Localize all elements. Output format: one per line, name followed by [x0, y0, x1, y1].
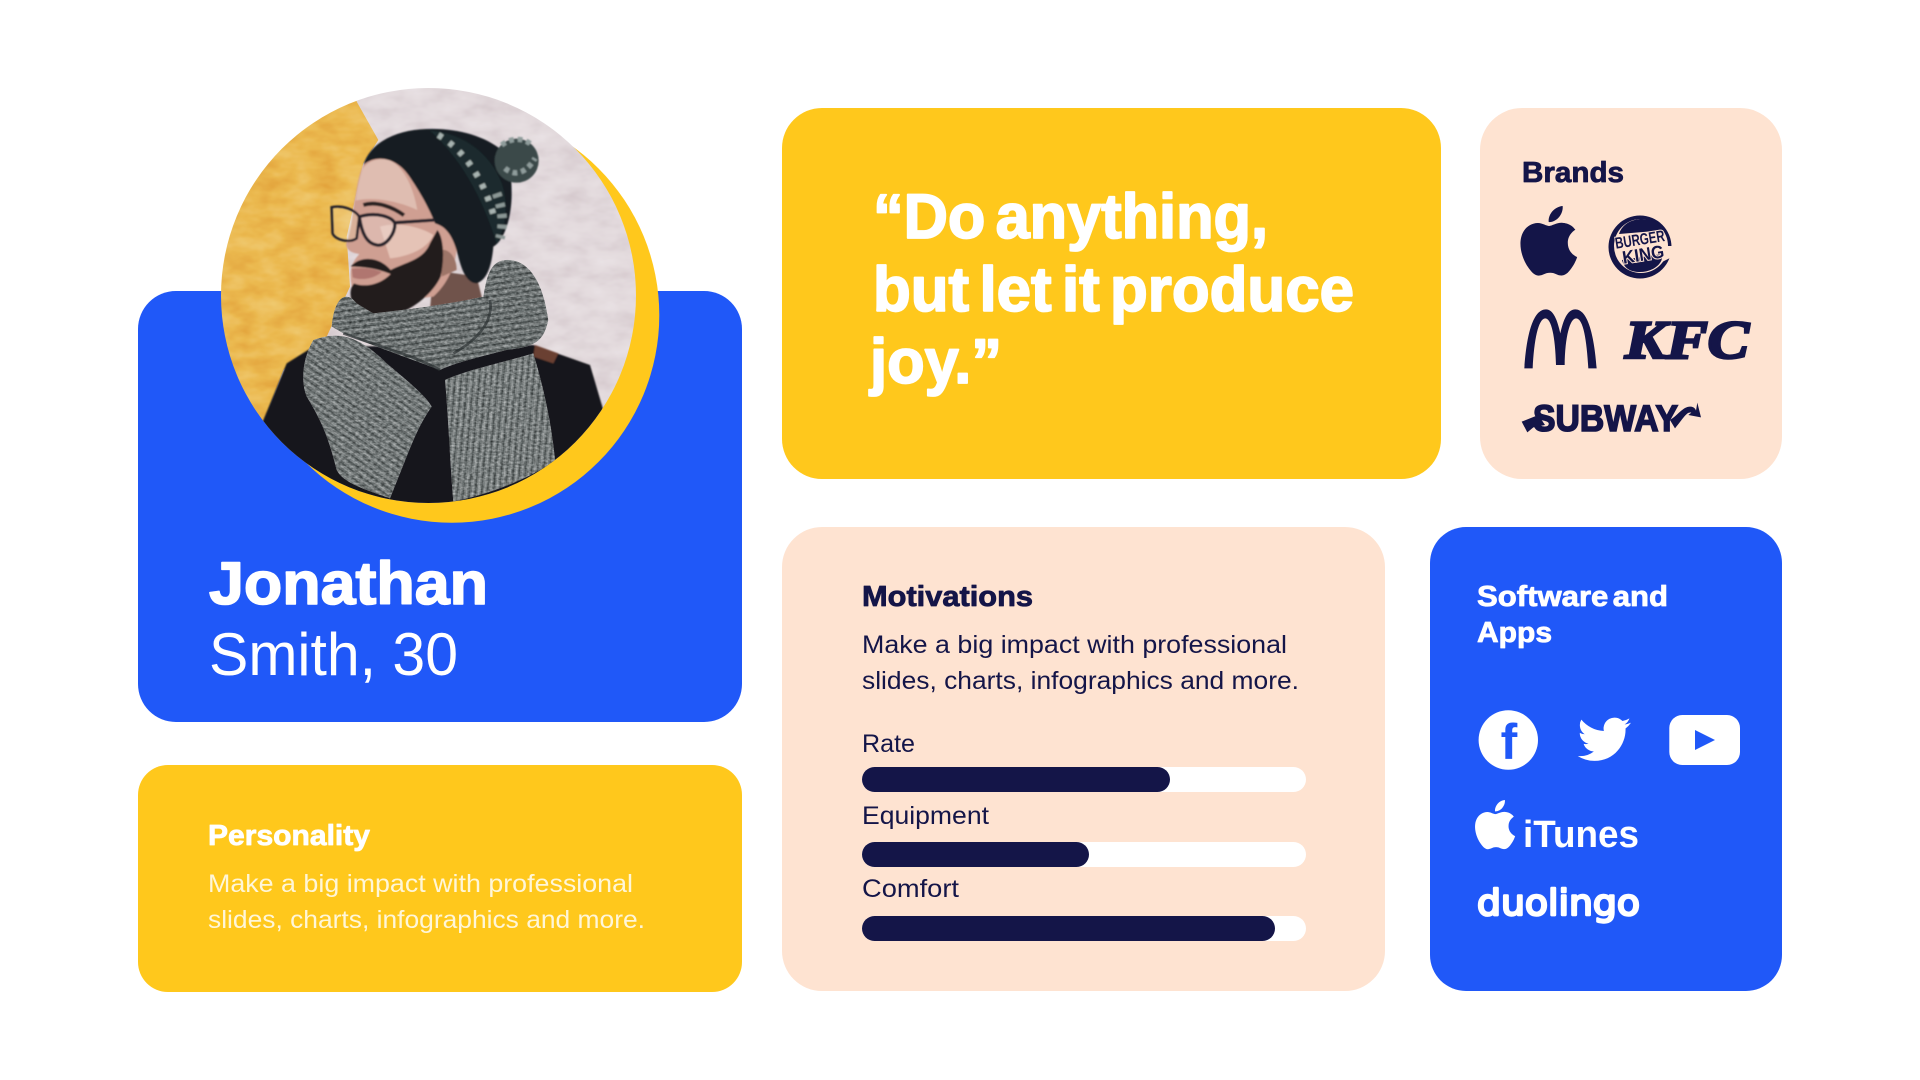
- scarf: [303, 260, 555, 502]
- name first: Jonathan: [209, 550, 488, 617]
- icon: youtube: [1669, 715, 1740, 765]
- heading: brands: Brands: [1522, 157, 1624, 189]
- panel: brands: [1480, 108, 1782, 479]
- quote text: but let it produce: [873, 255, 1354, 325]
- quote text: joy.”: [869, 327, 1002, 397]
- icon: burger king logo: [1608, 216, 1674, 278]
- logo: duolingo: duolingo: [1477, 883, 1640, 924]
- ear: [441, 250, 457, 277]
- name last and age: Smith, 30: [209, 621, 458, 688]
- panel: software and apps: [1430, 527, 1782, 991]
- face: [346, 157, 457, 305]
- pom-pom: [495, 139, 539, 183]
- bar: equipment: Equipment: [862, 802, 989, 830]
- yellow offset circle: [244, 108, 659, 523]
- panel: quote: [782, 108, 1441, 479]
- quote text: “Do anything,: [873, 182, 1268, 252]
- glasses: [332, 207, 359, 241]
- panel: personality: [138, 765, 742, 992]
- bar: rate: [862, 730, 1306, 792]
- motivations description: [862, 631, 1299, 695]
- panel: motivations: [782, 527, 1385, 991]
- heading: software and apps: [1477, 581, 1668, 649]
- icon: apple logo: [1520, 206, 1577, 276]
- icon: twitter: [1578, 718, 1631, 761]
- neck: [430, 270, 483, 310]
- personality description: slides, charts, infographics and more.: [208, 906, 645, 934]
- logo: subway: SUBWAY: [1533, 398, 1678, 439]
- hat: [363, 129, 512, 283]
- portrait photo: [221, 88, 636, 503]
- icon: mcdonalds arches: [1524, 309, 1597, 368]
- icon: facebook: f: [1501, 714, 1518, 770]
- logo: kfc: KFC: [1624, 310, 1750, 370]
- heading: personality: Personality: [208, 820, 370, 852]
- logo: itunes: iTunes: [1523, 814, 1639, 856]
- bar: comfort: Comfort: [862, 875, 959, 903]
- icon: burger king logo: KING: [1621, 241, 1666, 268]
- personality description: Make a big impact with professional: [208, 870, 633, 898]
- logo: itunes: [1475, 800, 1639, 856]
- bar: rate: Rate: [862, 730, 915, 758]
- jacket: [233, 345, 603, 513]
- icon: burger king logo: BURGER: [1614, 228, 1666, 253]
- bar: comfort: [862, 875, 1306, 941]
- heading: software and apps: Apps: [1477, 617, 1552, 649]
- panel: profile card: [138, 70, 742, 722]
- bar: equipment: [862, 802, 1306, 867]
- motivations description: Make a big impact with professional: [862, 631, 1287, 659]
- personality description: [208, 870, 645, 934]
- heading: software and apps: Software and: [1477, 581, 1668, 613]
- heading: motivations: Motivations: [862, 581, 1033, 613]
- icon: facebook: [1479, 710, 1538, 770]
- quote text: [869, 182, 1354, 397]
- motivations description: slides, charts, infographics and more.: [862, 667, 1299, 695]
- beard: [351, 230, 443, 315]
